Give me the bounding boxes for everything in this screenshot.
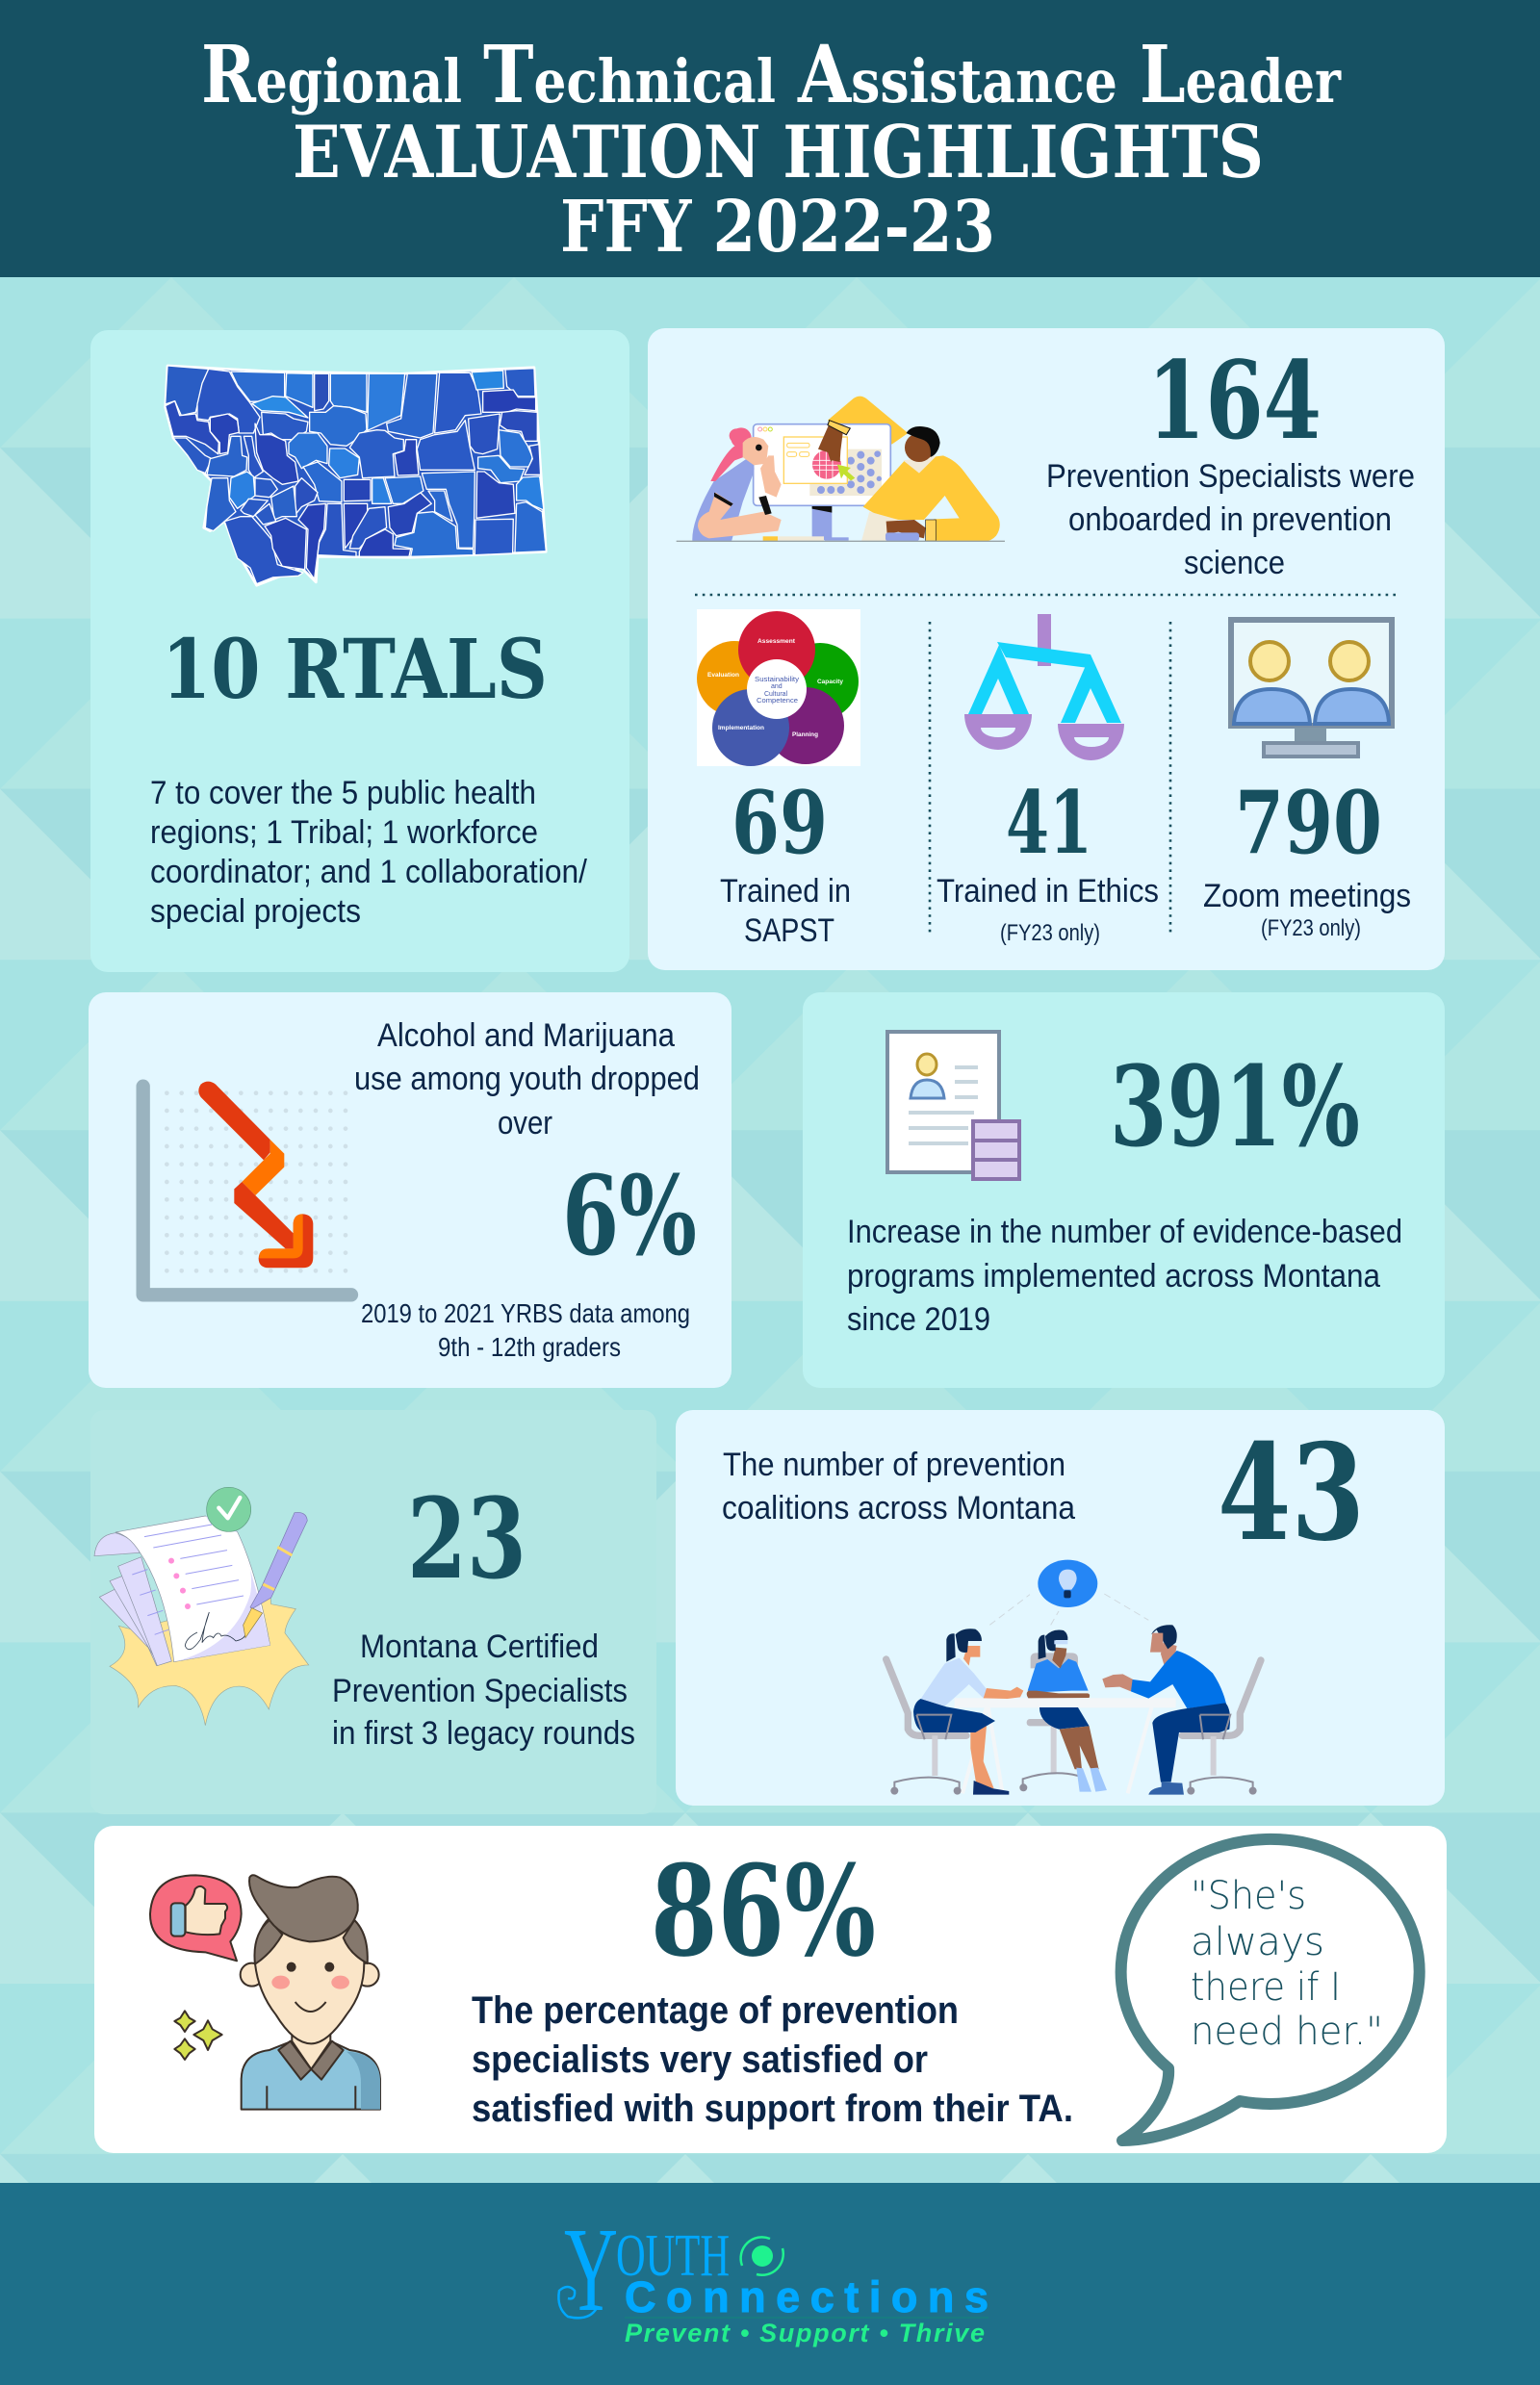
stat: 69 trained in SAPST — [720, 772, 851, 949]
description: coalitions — [722, 1447, 1075, 1526]
speech bubble: quote: need her." — [1191, 2010, 1383, 2054]
description: onboarded — [1046, 458, 1415, 581]
title line 1: Regional — [201, 29, 462, 121]
description: certified specialists — [332, 1628, 635, 1752]
note: YRBS data: 2019 to 2021 YRBS data among — [361, 1298, 690, 1328]
logo: Youth Connections: Y — [564, 2204, 618, 2337]
title line 1: Technical — [483, 29, 776, 121]
description: evidence-based programs: since 2019 — [847, 1301, 990, 1338]
description: RTAL coverage: regions; 1 Tribal; 1 workforce — [150, 814, 538, 851]
stat: 69 trained in SAPST: 69 — [732, 772, 828, 874]
stat: 23: 23 — [407, 1475, 526, 1604]
description: RTAL coverage — [150, 775, 588, 930]
title line 3: FFY 2022-23 — [560, 186, 995, 269]
description: alcohol and marijuana — [354, 1017, 700, 1141]
footer — [0, 2183, 1540, 2385]
icon: SAPST prevention framework diagram: Implementation — [718, 725, 764, 731]
description: onboarded: onboarded in prevention — [1068, 501, 1392, 538]
map of Montana counties — [166, 366, 546, 585]
description: onboarded: science — [1184, 545, 1285, 581]
icon: two people at monitor — [677, 397, 1005, 541]
stat: 10 RTALS: 10 RTALS — [162, 622, 548, 718]
icon: SAPST prevention framework diagram: Planning — [792, 731, 818, 738]
description: coalitions: coalitions across Montana — [722, 1490, 1075, 1526]
panel: satisfaction — [94, 1826, 1447, 2153]
panel: youth use dropped — [89, 992, 732, 1388]
icon: ethics scales — [964, 614, 1124, 760]
icon: smiling man with thumbs up — [150, 1875, 380, 2110]
description: satisfaction — [472, 1989, 1073, 2130]
icon: zoom meeting monitor — [1231, 620, 1392, 757]
stat: 69 trained in SAPST: SAPST — [744, 912, 834, 949]
header banner — [0, 0, 1540, 277]
icon: SAPST prevention framework diagram: Assessment — [757, 638, 796, 645]
stat: 69 trained in SAPST: Trained in — [720, 873, 851, 910]
note: YRBS data: 9th - 12th graders — [438, 1332, 621, 1362]
icon: SAPST prevention framework diagram: Competence — [757, 698, 798, 705]
stat: 790 zoom meetings: (FY23 only) — [1261, 915, 1361, 941]
speech bubble: quote: always — [1191, 1920, 1324, 1964]
stat: 86%: 86% — [651, 1837, 876, 1985]
speech bubble: quote: there if I — [1191, 1965, 1341, 2010]
note: YRBS data — [361, 1298, 690, 1362]
panel: evidence-based programs — [803, 992, 1445, 1388]
speech bubble: quote — [1121, 1839, 1420, 2141]
icon: SAPST prevention framework diagram: Cultural — [764, 691, 788, 698]
icon: SAPST prevention framework diagram — [697, 609, 860, 766]
logo: Youth Connections: Prevent • Support • Thrive — [625, 2319, 985, 2347]
description: alcohol and marijuana: Alcohol and Marijuana — [377, 1017, 675, 1054]
description: satisfaction: The percentage of prevention — [472, 1989, 959, 2032]
chart icon: downward arrow — [143, 1082, 351, 1295]
description: certified specialists: Prevention Specialists — [332, 1673, 628, 1709]
description: satisfaction: satisfied with support from their TA. — [472, 2088, 1073, 2130]
title line 1 — [201, 29, 1342, 121]
stat: 41 trained in ethics: (FY23 only) — [1000, 920, 1100, 946]
stat: 6%: 6% — [562, 1152, 697, 1280]
logo: Youth Connections: OUTH — [616, 2223, 730, 2289]
title line 1: Assistance — [797, 29, 1117, 121]
stat: 391%: 391% — [1110, 1042, 1360, 1172]
speech bubble: quote: "She's — [1191, 1874, 1306, 1918]
description: alcohol and marijuana: use among youth dropped — [354, 1061, 700, 1097]
panel: onboarding and training — [648, 328, 1445, 970]
icon: SAPST prevention framework diagram: Sustainability — [755, 677, 800, 683]
panel: 10 RTALS — [90, 330, 629, 972]
description: onboarded: Prevention Specialists were — [1046, 458, 1415, 495]
title line 2: EVALUATION HIGHLIGHTS — [293, 110, 1264, 194]
stat: 41 trained in ethics — [937, 772, 1159, 946]
description: evidence-based programs — [847, 1214, 1402, 1338]
icon: document with stack — [887, 1032, 1019, 1179]
icon: SAPST prevention framework diagram: Evaluation — [707, 672, 739, 679]
icon: SAPST prevention framework diagram: and — [771, 683, 783, 690]
stat: 790 zoom meetings: 790 — [1235, 772, 1382, 874]
stat: 164: 164 — [1147, 339, 1322, 464]
stat: 41 trained in ethics: 41 — [1006, 772, 1092, 874]
description: RTAL coverage: 7 to cover the 5 public health — [150, 775, 536, 811]
logo: Youth Connections: Connections — [625, 2272, 988, 2321]
description: RTAL coverage: special projects — [150, 893, 361, 930]
description: certified specialists: Montana Certified — [360, 1628, 599, 1665]
logo: Youth Connections — [558, 2204, 988, 2347]
icon: signed document and pen — [94, 1487, 309, 1726]
description: coalitions: The number of prevention — [723, 1447, 1065, 1483]
description: alcohol and marijuana: over — [498, 1105, 552, 1141]
logo swirl — [741, 2237, 783, 2275]
description: satisfaction: specialists very satisfied or — [472, 2039, 928, 2081]
stat: 43: 43 — [1218, 1414, 1365, 1571]
stat: 790 zoom meetings: Zoom meetings — [1203, 878, 1411, 914]
description: RTAL coverage: coordinator; and 1 collaboration/ — [150, 854, 588, 890]
description: certified specialists: in first 3 legacy rounds — [332, 1715, 635, 1752]
icon: SAPST prevention framework diagram: Capacity — [817, 679, 843, 685]
panel: certified prevention specialists — [90, 1410, 656, 1814]
stat: 790 zoom meetings — [1203, 772, 1411, 941]
description: evidence-based programs: Increase in the number of evidence-based — [847, 1214, 1402, 1250]
illustration: team meeting with idea bulb — [886, 1560, 1261, 1795]
stat: 41 trained in ethics: Trained in Ethics — [937, 873, 1159, 910]
title line 1: Leader — [1140, 29, 1342, 121]
description: evidence-based programs: programs implemented across Montana — [847, 1258, 1380, 1295]
panel: prevention coalitions — [676, 1410, 1445, 1806]
